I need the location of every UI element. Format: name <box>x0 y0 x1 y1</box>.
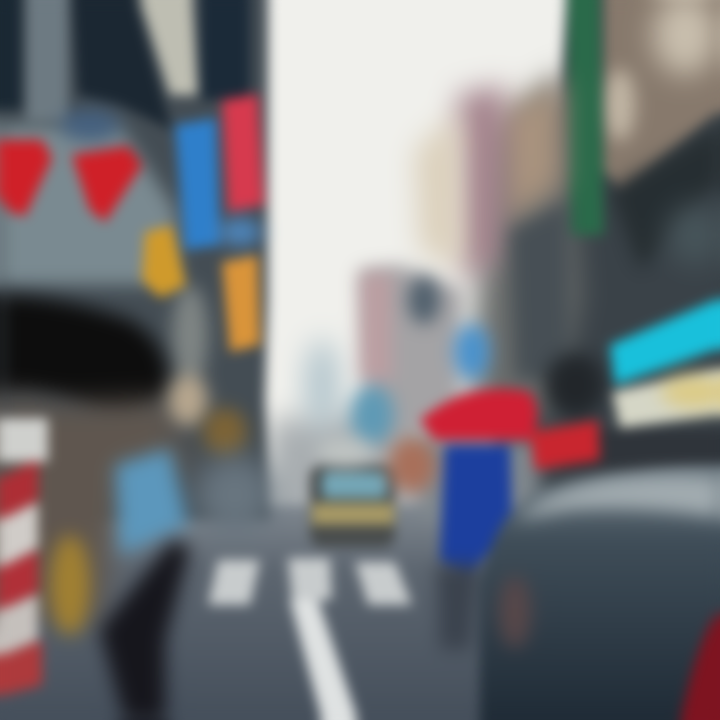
neon signs <box>560 298 720 470</box>
pedestrian in blue, left <box>100 448 190 720</box>
blue and red banners <box>175 94 264 250</box>
dark foreground mass <box>0 295 168 414</box>
striped red and white pole <box>0 418 48 696</box>
pedestrian with red umbrella <box>388 388 600 650</box>
red heart shapes <box>0 140 142 222</box>
lane line <box>290 600 358 720</box>
right buildings <box>415 0 720 500</box>
large car, foreground right <box>480 465 720 720</box>
haze at street end <box>270 400 540 540</box>
street stall lower left <box>0 374 275 635</box>
road surface <box>0 505 720 720</box>
distant buildings <box>304 265 490 450</box>
yellow vehicle in distance <box>310 438 395 547</box>
yellow and orange banners <box>142 225 260 352</box>
crosswalk stripes <box>208 558 412 605</box>
left building mass <box>0 0 270 520</box>
